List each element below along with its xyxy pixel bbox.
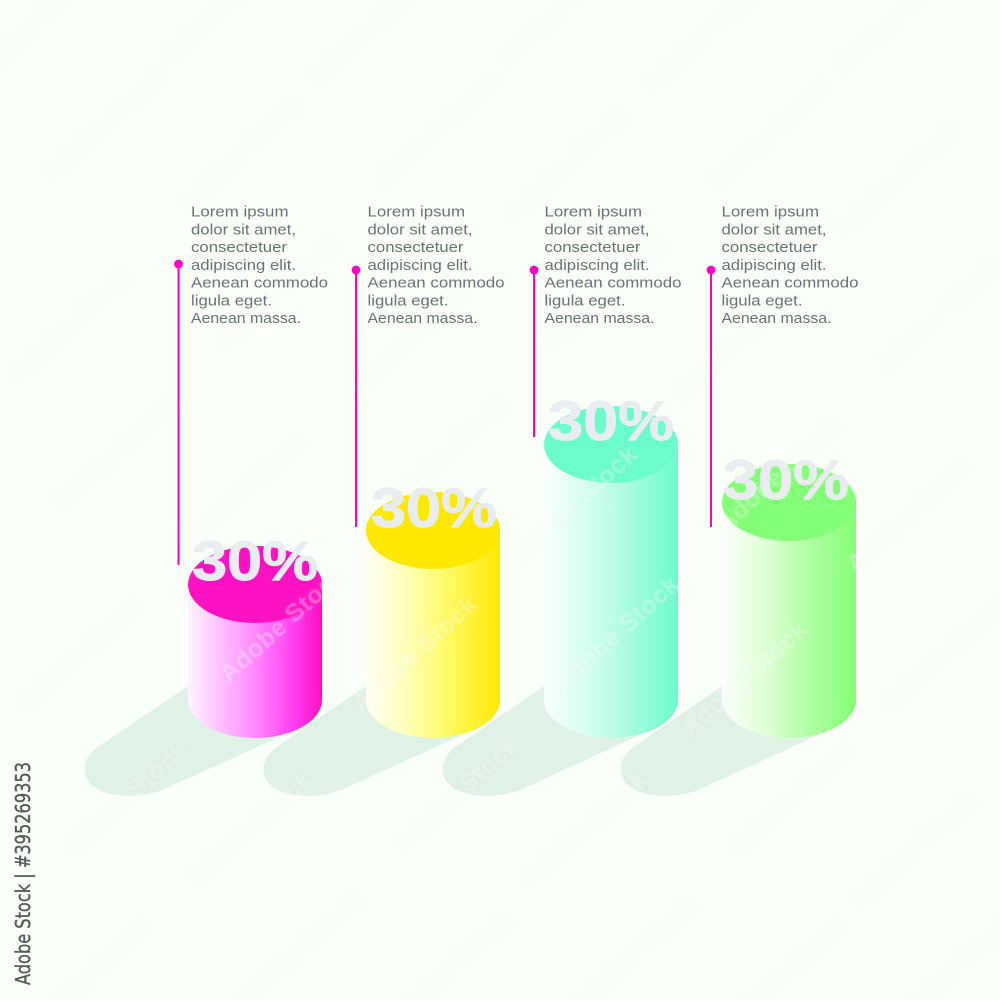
text block 2: adipiscing elit. [368, 257, 472, 274]
shadow 1 [84, 686, 282, 796]
cylinder side 3 [544, 445, 678, 738]
text block 1: ligula eget. [191, 292, 272, 310]
text block 2: Aenean commodo [368, 275, 504, 292]
text block 2 [368, 204, 504, 327]
text block 1: Aenean commodo [191, 275, 328, 292]
cylinder side 2 [366, 530, 500, 738]
text block 4: dolor sit amet, [722, 221, 826, 238]
text block 3: ligula eget. [544, 292, 626, 310]
text block 4: adipiscing elit. [722, 257, 826, 274]
value 2: 30% [371, 476, 497, 539]
text block 2: Aenean massa. [368, 310, 478, 327]
leader line 2 [352, 266, 360, 527]
watermark overlay: Adobe Stock [11, 590, 148, 718]
watermark overlay: Adobe Stock [516, 765, 653, 893]
watermark overlay: Adobe Stock [666, 280, 803, 408]
cylinder side 4 [722, 502, 856, 738]
text block 2: Lorem ipsum [368, 204, 465, 220]
panel: bar 3 teal [442, 406, 678, 796]
cylinder top 2 [366, 492, 500, 569]
value 4: 30% [723, 448, 849, 511]
text block 1: dolor sit amet, [191, 221, 296, 238]
text block 4: Aenean commodo [722, 275, 858, 292]
text block 3 [544, 204, 682, 327]
panel: bar 1 magenta [84, 546, 322, 796]
watermark overlay: Adobe Stock [346, 590, 483, 718]
watermark overlay: Adobe Stock [701, 70, 838, 198]
watermark overlay: Adobe Stock [46, 390, 183, 518]
panel: bar 4 green [620, 464, 856, 796]
text block 2: ligula eget. [368, 292, 448, 310]
watermark overlay: Adobe Stock [2, 260, 139, 388]
shadow 2 [263, 686, 460, 796]
value 1: 30% [192, 529, 318, 592]
text block 1: adipiscing elit. [191, 257, 296, 274]
cylinder top 4 [722, 464, 856, 541]
text block 2: dolor sit amet, [368, 221, 472, 238]
watermark overlay: Adobe Stock [378, 388, 515, 516]
watermark overlay: Adobe Stock [536, 230, 673, 358]
watermark overlay: Adobe Stock [841, 450, 978, 578]
watermark overlay: Adobe Stock [506, 440, 643, 568]
text block 4 [722, 204, 858, 327]
text block 3: consectetuer [544, 239, 640, 256]
watermark overlay: Adobe Stock [208, 230, 345, 358]
cylinder side 1 [188, 584, 322, 738]
value 3: 30% [548, 389, 674, 452]
watermark overlay: Adobe Stock [214, 560, 351, 688]
watermark overlay: Adobe Stock [548, 570, 685, 698]
watermark overlay: Adobe Stock [56, 735, 193, 863]
stock id side label: Adobe Stock | #395269353 [11, 762, 35, 985]
watermark overlay: Adobe Stock [676, 615, 813, 743]
watermark overlay: Adobe Stock [336, 280, 473, 408]
text block 4: ligula eget. [722, 292, 802, 310]
watermark overlay: Adobe Stock [171, 90, 308, 218]
text block 1: consectetuer [191, 239, 287, 256]
shadow 4 [620, 686, 816, 796]
watermark overlay: Adobe Stock [498, 100, 635, 228]
text block 4: Aenean massa. [722, 310, 832, 327]
watermark overlay: Adobe Stock [181, 765, 318, 893]
text block 3: Aenean massa. [544, 310, 654, 327]
shadow 3 [442, 686, 638, 796]
leader line 1 [174, 260, 183, 565]
watermark overlay: Adobe Stock [388, 730, 525, 858]
watermark overlay: Adobe Stock [36, 60, 173, 188]
text block 3: Aenean commodo [544, 275, 682, 292]
text block 1 [191, 204, 328, 327]
text block 1: Lorem ipsum [191, 204, 288, 220]
watermark overlay: Adobe Stock [721, 735, 858, 863]
cylinder top 1 [188, 546, 322, 623]
text block 3: Lorem ipsum [544, 204, 642, 220]
cylinder top 3 [544, 406, 678, 483]
watermark overlay: Adobe Stock [176, 425, 313, 553]
panel: bar 2 yellow [263, 492, 500, 796]
leader line 3 [530, 266, 538, 437]
text block 3: adipiscing elit. [544, 257, 650, 274]
text block 1: Aenean massa. [191, 310, 301, 327]
watermark overlay: Adobe Stock [846, 785, 983, 913]
text block 2: consectetuer [368, 239, 464, 256]
leader line 4 [707, 266, 715, 527]
watermark overlay: Adobe Stock [711, 410, 848, 538]
watermark overlay: Adobe Stock [828, 115, 965, 243]
text block 4: Lorem ipsum [722, 204, 819, 220]
text block 4: consectetuer [722, 239, 818, 256]
text block 3: dolor sit amet, [544, 221, 650, 238]
watermark overlay: Adobe Stock [369, 65, 506, 193]
